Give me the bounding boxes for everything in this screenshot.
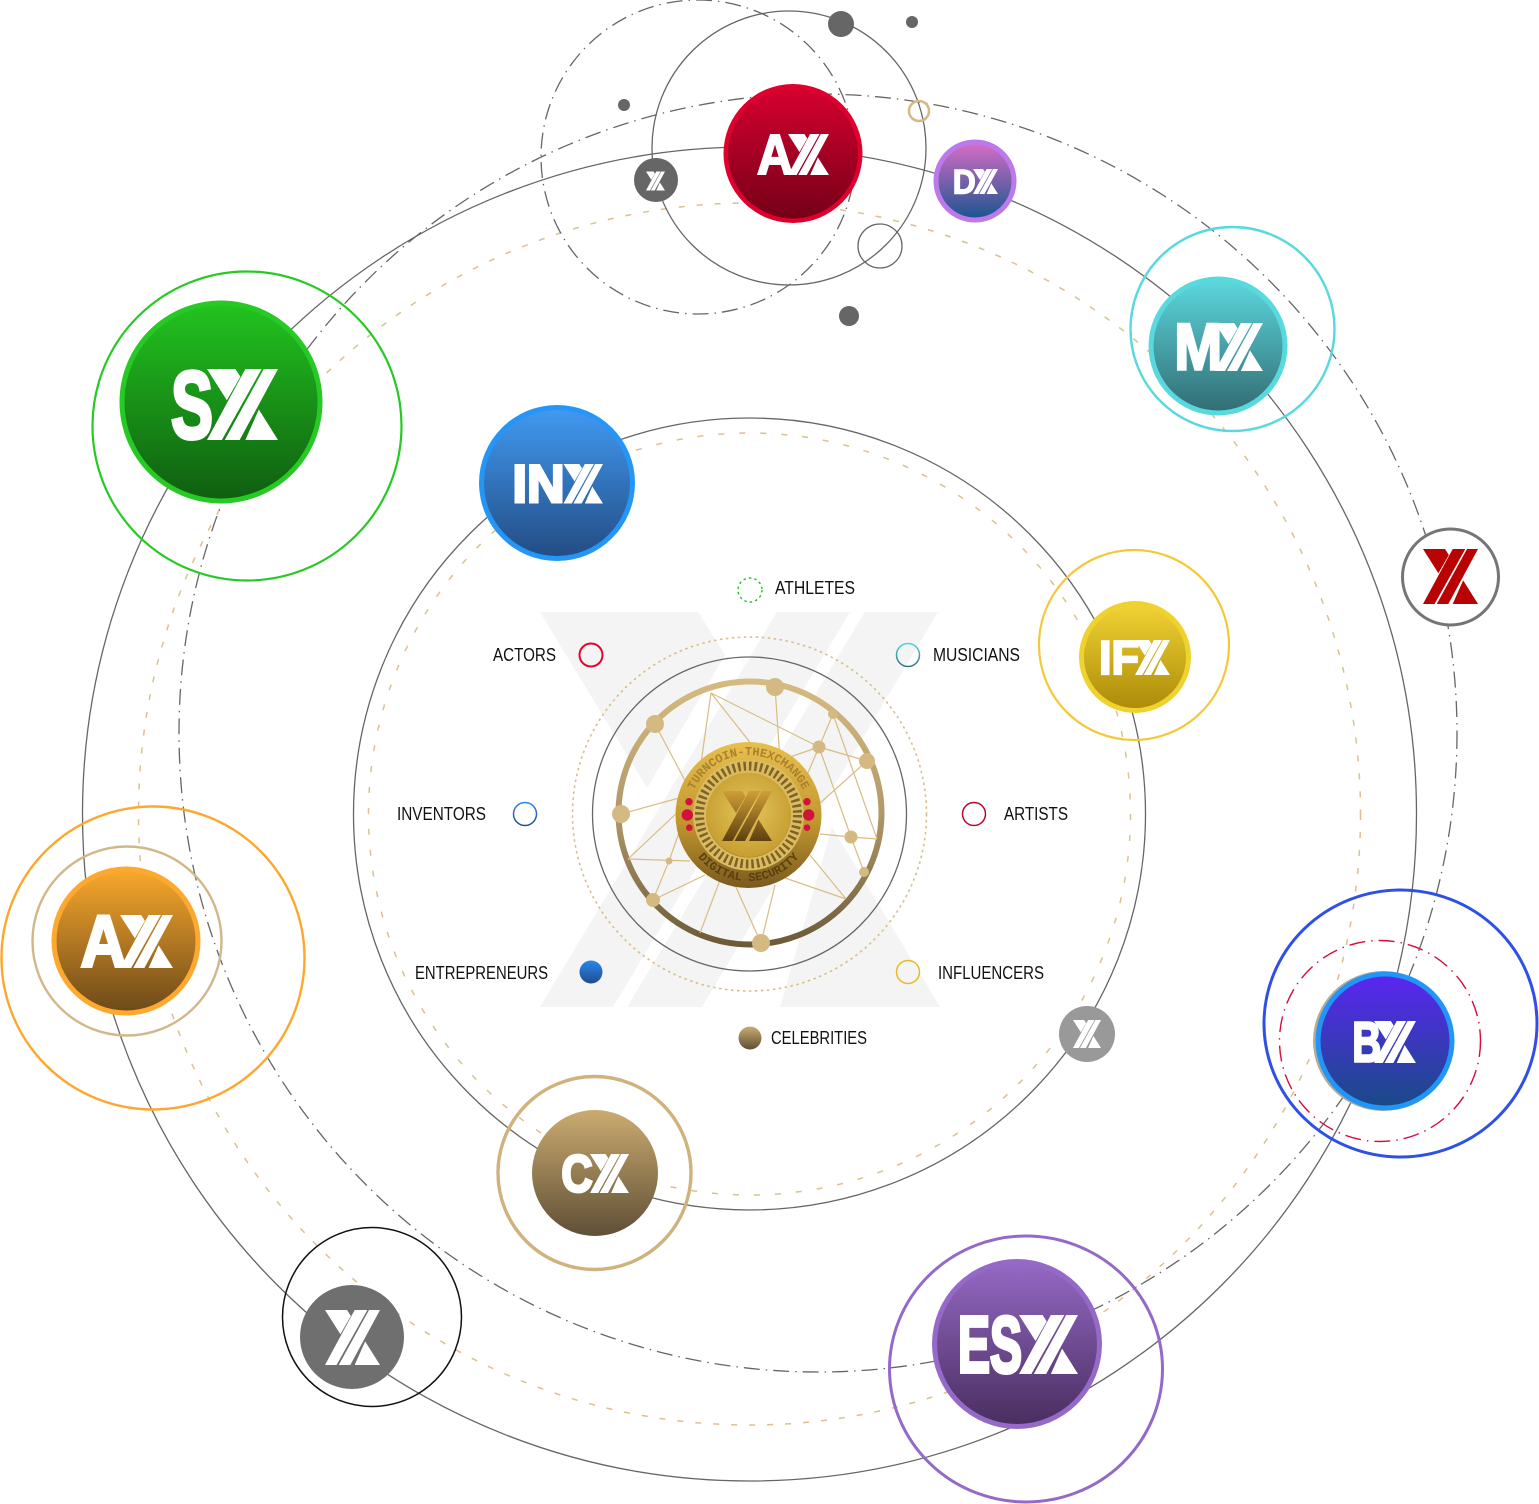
legend: musicians: MUSICIANS bbox=[933, 645, 1020, 665]
central gold coin bbox=[676, 742, 822, 888]
planet: purple ESX: ES bbox=[958, 1300, 1022, 1389]
legend: actors: ACTORS bbox=[493, 645, 556, 665]
legend: entrepreneurs: ENTREPRENEURS bbox=[415, 963, 548, 983]
planet: tan CX: C bbox=[562, 1146, 592, 1204]
orbit: middle grey ring bbox=[354, 418, 1146, 1210]
legend: celebrities: CELEBRITIES bbox=[771, 1028, 867, 1048]
planet: green SX: S bbox=[171, 352, 213, 459]
planet: blue BX: B bbox=[1352, 1010, 1381, 1074]
ring: tan CX bbox=[498, 1076, 691, 1270]
planet: red X badge bbox=[1402, 529, 1498, 625]
legend: athletes bbox=[738, 578, 855, 602]
planet: orange AX bbox=[52, 866, 200, 1016]
legend: celebrities bbox=[738, 1026, 867, 1050]
legend: artists bbox=[962, 802, 1068, 826]
legend: inventors bbox=[397, 802, 536, 826]
planet: red AX bbox=[724, 84, 862, 223]
coin rubies bbox=[682, 798, 814, 831]
coin top lettering: TURNCOIN-THEXCHANGE bbox=[687, 747, 810, 790]
planet: blue INX bbox=[479, 405, 635, 561]
legend: influencers: INFLUENCERS bbox=[938, 963, 1044, 983]
planet: grey X bbox=[300, 1285, 404, 1389]
ring: orange AX outer bbox=[2, 806, 304, 1110]
planet: blue BX bbox=[1313, 971, 1454, 1111]
background X watermark bbox=[540, 612, 940, 1007]
orbit: top dash-dot ring bbox=[541, 0, 855, 314]
coin X mark bbox=[722, 791, 772, 841]
planet: red AX: A bbox=[757, 123, 793, 187]
orbit: middle gold dashed ring bbox=[368, 433, 1130, 1195]
legend: artists: ARTISTS bbox=[1004, 804, 1068, 824]
planet: cyan MX bbox=[1148, 276, 1288, 416]
orbit: inner gold dotted ring bbox=[572, 637, 926, 991]
legend: influencers bbox=[896, 960, 1044, 984]
ring: green SX bbox=[92, 272, 402, 580]
legend: musicians bbox=[896, 644, 1020, 666]
small gold ring bbox=[909, 101, 929, 121]
planet: purple DX: D bbox=[953, 163, 976, 201]
coin bottom lettering: DIGITAL SECURITY bbox=[698, 852, 798, 881]
legend: inventors: INVENTORS bbox=[397, 804, 486, 824]
legend: actors bbox=[493, 644, 602, 666]
ring: blue BX bbox=[1264, 890, 1537, 1157]
central gold network bbox=[612, 678, 882, 952]
planet: purple ESX bbox=[932, 1259, 1102, 1429]
planet: orange AX: A bbox=[80, 902, 126, 982]
small grey ring bbox=[858, 224, 902, 268]
orbit: inner grey ring bbox=[592, 657, 906, 971]
legend: athletes: ATHLETES bbox=[775, 578, 855, 598]
orbit: outer grey ring bbox=[82, 147, 1416, 1481]
planet: yellow IFX bbox=[1079, 601, 1191, 713]
planet: tan CX bbox=[532, 1110, 658, 1236]
orbit: outer gold dashed ring bbox=[138, 203, 1360, 1425]
planet: small grey X bbox=[634, 158, 678, 202]
planet: blue INX: IN bbox=[512, 455, 564, 514]
ring: red dash-dot BX bbox=[1280, 940, 1480, 1142]
ring: cyan MX bbox=[1130, 227, 1334, 431]
satellite dots bbox=[618, 11, 918, 326]
planet: purple DX bbox=[934, 140, 1016, 222]
ring: yellow IFX bbox=[1039, 550, 1229, 740]
planet: yellow IFX: IF bbox=[1099, 631, 1139, 684]
planet: light grey X bbox=[1059, 1006, 1115, 1062]
ring: orange AX inner bbox=[32, 846, 222, 1036]
ring: black around grey X bbox=[282, 1228, 462, 1406]
orbit: top grey ring around red AX bbox=[652, 11, 926, 285]
ring: purple ESX bbox=[890, 1236, 1162, 1502]
planet: green SX bbox=[120, 300, 322, 504]
planet: cyan MX: M bbox=[1174, 310, 1222, 384]
orbit: outer dash-dot ring bbox=[179, 94, 1457, 1372]
